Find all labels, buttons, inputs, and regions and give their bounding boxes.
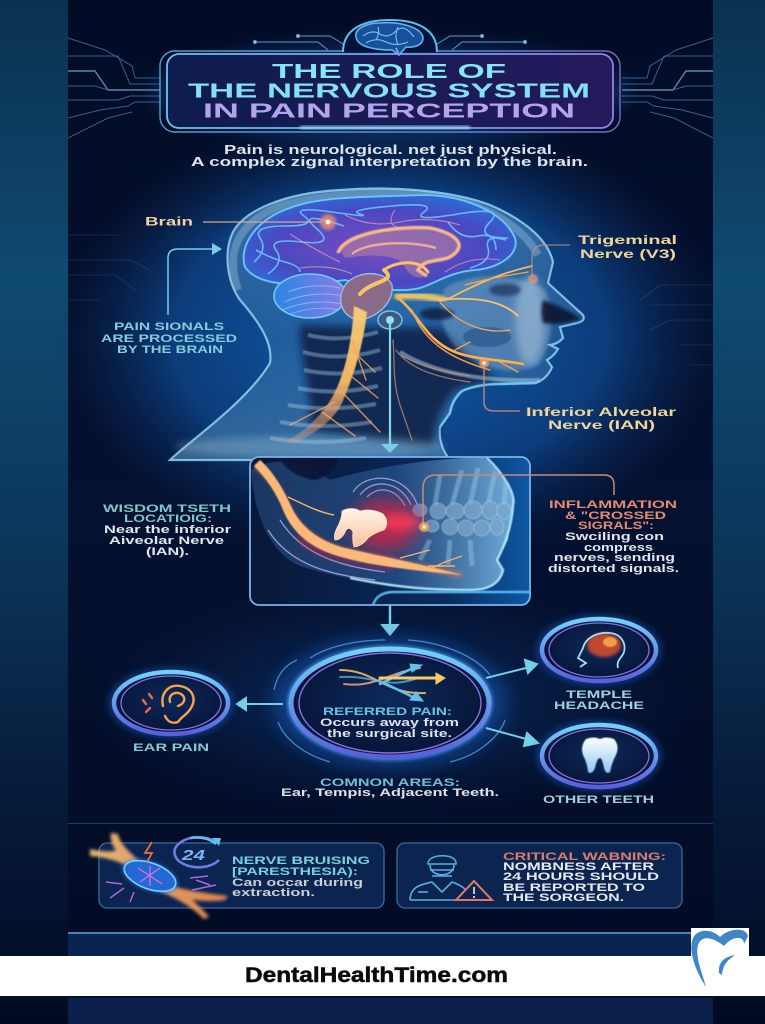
- panel: jaw close-up: [250, 457, 540, 610]
- neck curve: [372, 590, 530, 604]
- icon: ear pain: [109, 668, 233, 738]
- trigeminal nerves: [397, 266, 532, 376]
- label: inferior alveolar nerve: Nerve (IAN): [548, 418, 655, 432]
- neck dark interior: [300, 325, 500, 448]
- critical warning text: THE SORGEON.: [503, 892, 624, 904]
- text: inflammation and crossed signals: & "CROSSED: [565, 510, 666, 522]
- cerebellum folds: [282, 286, 344, 314]
- nerve bruising text: [232, 855, 370, 899]
- critical warning text: 24 HOURS SHOULD: [503, 871, 659, 883]
- skull face: [441, 276, 551, 371]
- label: temple headache: TEMPLE: [566, 689, 632, 701]
- nerve bruising text: NERVE BRUISING: [232, 855, 370, 867]
- label: brain: Brain: [145, 214, 193, 228]
- nerve bruising text: Can occar during: [232, 877, 363, 889]
- label: trigeminal nerve: Nerve (V3): [580, 247, 676, 261]
- dark socket: [280, 458, 338, 480]
- teeth region: [463, 327, 511, 347]
- critical warning text: NOMBNESS AFTER: [503, 861, 654, 873]
- nerve bruising text: extraction.: [232, 887, 315, 899]
- referred pain text: [320, 706, 459, 740]
- mandible: [251, 457, 513, 590]
- head silhouette: [170, 189, 584, 460]
- text: common areas: [281, 777, 499, 799]
- banner glow line: [300, 126, 470, 129]
- label: trigeminal nerve: Trigeminal: [578, 233, 677, 247]
- panel: referred pain circle: [272, 637, 508, 769]
- label: inferior alveolar nerve: [479, 358, 677, 432]
- site name: DentalHealthTime.com: [245, 964, 508, 987]
- label: other teeth: OTHER TEETH: [543, 794, 654, 806]
- panel: critical warning: [397, 843, 682, 908]
- callout: inflammation connector: [419, 475, 614, 532]
- subtitle: Pain is neurological. net just physical.: [224, 143, 557, 157]
- inferior alveolar nerve: [255, 465, 462, 575]
- title banner: [150, 20, 630, 142]
- label: pain signals: [101, 243, 237, 356]
- text: inflammation and crossed signals: [548, 499, 679, 575]
- chin edge: [350, 457, 513, 590]
- label: temple headache: [554, 689, 644, 712]
- faint side circuitry: [68, 235, 713, 365]
- text: inflammation and crossed signals: compress: [584, 542, 653, 554]
- critical warning text: [503, 851, 666, 904]
- gyri: [254, 205, 508, 274]
- text: wisdom teeth location: [103, 503, 232, 558]
- text: inflammation and crossed signals: INFLAMMATION: [549, 499, 677, 511]
- jaw lower band: [400, 352, 540, 380]
- panel frame: [250, 457, 530, 605]
- cerebellum: [274, 274, 346, 318]
- icon: bruised nerve: [90, 833, 228, 919]
- teeth: [413, 501, 511, 536]
- right circuit decoration: [622, 38, 713, 138]
- vertebrae: [270, 332, 382, 442]
- inflammation glow: [351, 499, 419, 551]
- text: wisdom teeth location: LOCATIOIG:: [124, 513, 212, 525]
- eye socket: [420, 308, 454, 320]
- text: wisdom teeth location: Near the inferior: [104, 524, 232, 536]
- label: pain signals: PAIN SIONALS: [114, 321, 224, 333]
- subtitle: [191, 143, 588, 169]
- icon: warning triangle: [456, 881, 492, 900]
- icon: 24 hour clock: 24: [181, 847, 206, 864]
- tooth: [334, 508, 387, 547]
- referred pain text: Occurs away from: [320, 717, 459, 729]
- label: temple headache: HEADACHE: [554, 700, 644, 712]
- arrow: signal to brain: [168, 243, 222, 315]
- inner limbic arc: [338, 228, 459, 276]
- critical warning text: CRITICAL WABNING:: [503, 851, 666, 863]
- nerve forks: [90, 833, 228, 919]
- icon: crossed signals: [340, 664, 445, 701]
- label: inferior alveolar nerve: Inferior Alveolar: [526, 405, 677, 419]
- footer band: [0, 956, 765, 998]
- arrows: referred pain branches: [237, 660, 538, 746]
- brain: [244, 195, 516, 318]
- nerve bruising text: [PARESTHESIA):: [232, 866, 358, 878]
- icon: surgeon: [410, 856, 466, 900]
- tooth roots upper: [420, 468, 506, 566]
- text: inflammation and crossed signals: nerves, sending: [554, 552, 675, 564]
- text: wisdom teeth location: Aiveolar Nerve: [109, 535, 224, 547]
- neck lower haze: [175, 436, 445, 458]
- neck front glow: [440, 383, 536, 427]
- arrow: brain to jaw: [381, 316, 399, 453]
- title text: THE ROLE OF: [272, 61, 506, 83]
- subtitle: A complex zignal interpretation by the brain.: [191, 155, 588, 169]
- label: pain signals: ARE PROCESSED: [101, 333, 237, 345]
- label: brain: [145, 214, 336, 230]
- label: trigeminal nerve: [528, 233, 677, 284]
- title text: IN PAIN PERCEPTION: [203, 100, 575, 122]
- skull rim band: [233, 193, 538, 290]
- inner limbic fill: [340, 229, 458, 277]
- spine node: [378, 311, 402, 329]
- text: wisdom teeth location: WISDOM TSETH: [103, 503, 231, 515]
- arch connectors: [253, 34, 527, 50]
- icon: 24 hour clock: [174, 837, 221, 867]
- logo: tooth: [691, 928, 749, 987]
- illustration: head and brain: [170, 189, 584, 460]
- left circuit decoration: [68, 38, 160, 138]
- nostril shadow: [542, 300, 581, 324]
- spinal nerves: [284, 263, 470, 443]
- referred pain text: the surgical site.: [327, 728, 452, 740]
- outer arcs: [274, 640, 505, 762]
- title text: [188, 61, 590, 122]
- text: inflammation and crossed signals: distorted signals.: [548, 563, 679, 575]
- text: common areas: Ear, Tempis, Adjacent Teeth.: [281, 787, 499, 799]
- icon: other teeth: [537, 721, 661, 791]
- text: inflammation and crossed signals: SIGRALS":: [578, 520, 654, 532]
- nerve waves: [268, 478, 417, 580]
- title text: THE NERVOUS SYSTEM: [188, 80, 590, 102]
- text: inflammation and crossed signals: Swciling con: [565, 531, 664, 543]
- text: wisdom teeth location: (IAN).: [146, 546, 189, 558]
- icon: brain: [356, 23, 423, 55]
- text: common areas: COMNON AREAS:: [320, 777, 460, 789]
- label: pain signals: BY THE BRAIN: [117, 344, 223, 356]
- brainstem: [341, 274, 392, 320]
- icon: temple headache: [537, 615, 661, 685]
- banner panel: [167, 54, 613, 128]
- referred pain text: REFERRED PAIN:: [323, 706, 452, 718]
- label: ear pain: EAR PAIN: [133, 742, 209, 754]
- panel: nerve bruising: [90, 833, 384, 919]
- banner frame: [160, 51, 620, 132]
- critical warning text: BE REPORTED TO: [503, 882, 646, 894]
- title arch: [343, 20, 437, 52]
- arrow: jaw to referred pain: [381, 605, 399, 635]
